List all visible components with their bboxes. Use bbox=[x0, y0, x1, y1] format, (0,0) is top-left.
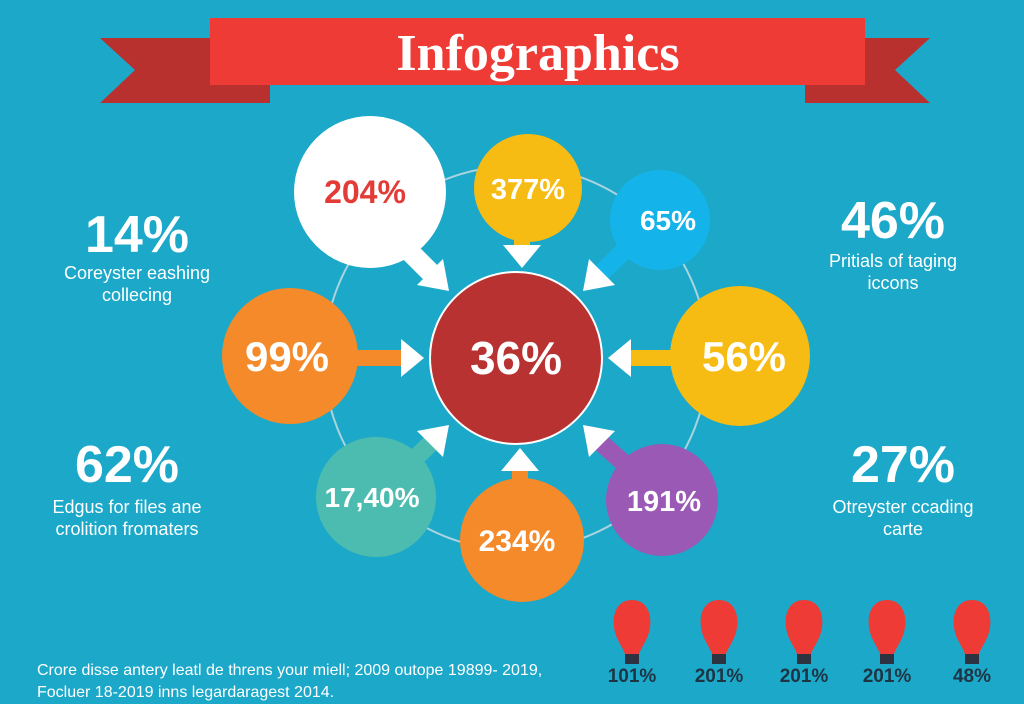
stat: 46%: Pritials of taging bbox=[829, 251, 957, 271]
icon: bulb 201% a bbox=[695, 600, 743, 687]
footnote bbox=[37, 662, 542, 701]
stat: 62% bbox=[52, 436, 202, 539]
circle: center 36%: 36% bbox=[470, 332, 562, 384]
circle: 377% bbox=[474, 134, 582, 242]
stat: 62%: Edgus for files ane bbox=[52, 497, 202, 517]
circle: 204%: 204% bbox=[324, 174, 406, 210]
circle: 191%: 191% bbox=[627, 486, 701, 518]
title banner bbox=[100, 18, 930, 103]
circle: 204% bbox=[294, 116, 446, 268]
arrows to center bbox=[340, 230, 690, 490]
icon: bulb 201% b bbox=[780, 600, 828, 687]
stat: 14%: Coreyster eashing bbox=[64, 263, 210, 283]
icon: bulb 201% a: 201% bbox=[695, 666, 743, 687]
icon: bulb 201% c: 201% bbox=[863, 666, 911, 687]
footnote: Crore disse antery leatl de threns your miell; 2009 outope 19899- 2019, bbox=[37, 662, 542, 679]
circle: 234% bbox=[460, 478, 584, 602]
circle: 65% bbox=[610, 170, 710, 270]
circle: 56%: 56% bbox=[702, 333, 786, 380]
icon: bulb 101% bbox=[608, 600, 656, 687]
circle: 377%: 377% bbox=[491, 174, 565, 206]
stat: 14%: 14% bbox=[85, 206, 189, 264]
stat: 14%: collecing bbox=[102, 285, 172, 305]
stat: 62%: crolition fromaters bbox=[55, 519, 199, 539]
stat: 27%: Otreyster ccading bbox=[832, 497, 974, 517]
circle: 191% bbox=[606, 444, 718, 556]
stat: 27% bbox=[832, 436, 974, 539]
icon: bulb 48%: 48% bbox=[953, 666, 991, 687]
circle: 56% bbox=[670, 286, 810, 426]
circle: 17,40% bbox=[316, 437, 436, 557]
circle: 65%: 65% bbox=[640, 205, 696, 236]
circle: 99%: 99% bbox=[245, 333, 329, 380]
icon: bulb 201% c bbox=[863, 600, 911, 687]
bulb row bbox=[608, 600, 991, 687]
circle: center 36% bbox=[430, 272, 602, 444]
footnote: Focluer 18-2019 inns legardaragest 2014. bbox=[37, 684, 334, 701]
circle: 234%: 234% bbox=[479, 525, 555, 558]
stat: 14% bbox=[64, 206, 210, 305]
icon: bulb 48% bbox=[953, 600, 991, 687]
icon: bulb 201% b: 201% bbox=[780, 666, 828, 687]
icon: bulb 101%: 101% bbox=[608, 666, 656, 687]
stat: 27%: carte bbox=[883, 519, 923, 539]
title: Infographics bbox=[396, 25, 680, 82]
stat: 62%: 62% bbox=[75, 436, 179, 494]
stat: 46%: iccons bbox=[867, 273, 919, 293]
stat: 27%: 27% bbox=[851, 436, 955, 494]
stat: 46%: 46% bbox=[841, 192, 945, 250]
orbit ring bbox=[324, 166, 708, 550]
stat: 46% bbox=[829, 192, 957, 293]
circle: 99% bbox=[222, 288, 358, 424]
circle: 17,40%: 17,40% bbox=[325, 482, 420, 513]
